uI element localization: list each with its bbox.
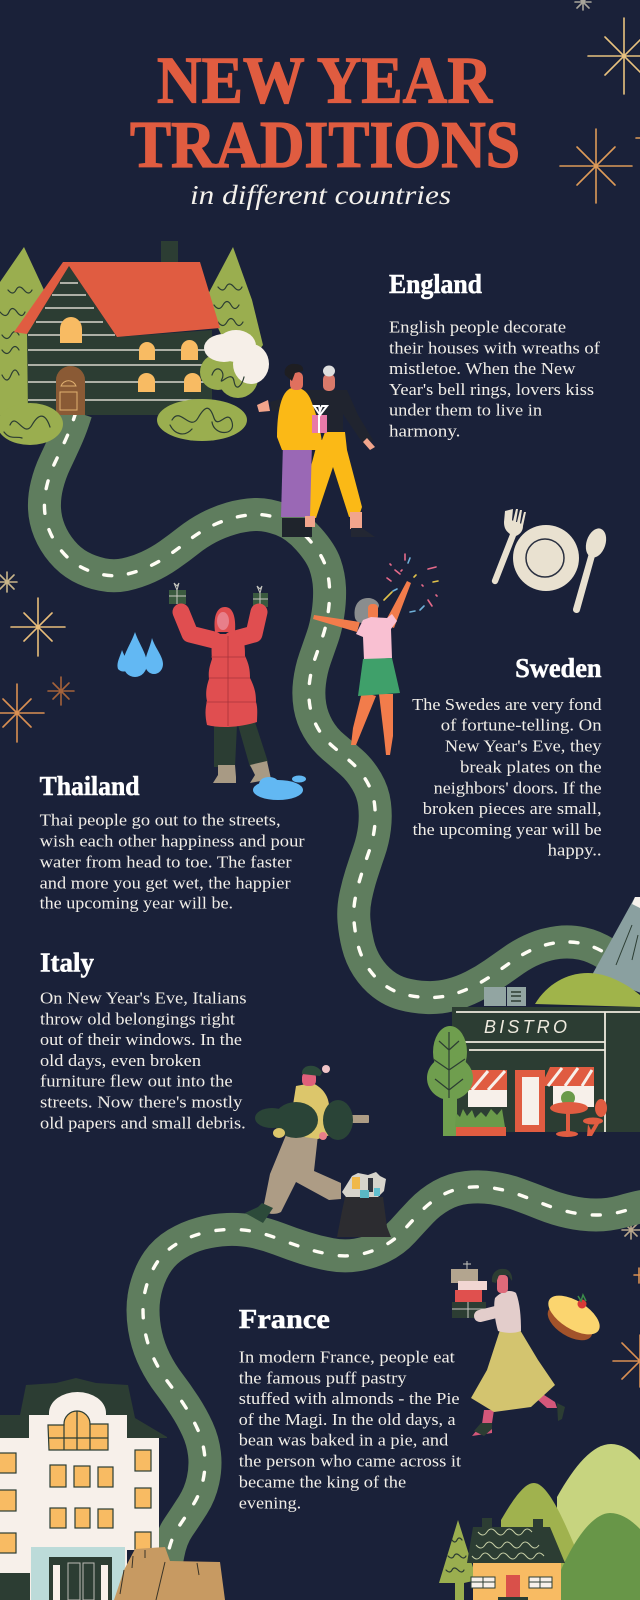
icon: arched window bbox=[48, 1411, 108, 1450]
subtitle: in different countries bbox=[190, 180, 451, 210]
heading: France: France bbox=[239, 1304, 330, 1334]
road: lower bbox=[143, 1187, 640, 1570]
text: Sweden: of fortune-telling. On bbox=[441, 716, 602, 735]
text: Italy: old papers and small debris. bbox=[40, 1113, 246, 1132]
text: Thailand: water from head to toe. The faster bbox=[40, 852, 292, 871]
text: England: harmony. bbox=[389, 422, 460, 441]
stars: left side bbox=[0, 572, 74, 742]
title bbox=[130, 44, 520, 182]
text: Sweden: neighbors' doors. If the bbox=[434, 778, 602, 797]
text: Thailand: Thai people go out to the streets, bbox=[40, 811, 281, 830]
panel: England bbox=[389, 269, 600, 441]
heading: Sweden: Sweden bbox=[515, 653, 602, 683]
text: Sweden: break plates on the bbox=[460, 757, 602, 776]
text: Thailand: and more you get wet, the happier bbox=[40, 873, 291, 892]
icon: trash bag bbox=[337, 1172, 391, 1237]
text: Thailand: wish each other happiness and pour bbox=[40, 832, 305, 851]
text: France: the person who came across it bbox=[239, 1452, 461, 1471]
text: Thailand bbox=[40, 811, 305, 912]
icon: cafe table and chair bbox=[550, 1091, 607, 1137]
icon: menu board bbox=[484, 987, 526, 1006]
icon: small pine tree bbox=[439, 1520, 477, 1600]
text: England: mistletoe. When the New bbox=[389, 359, 576, 378]
text: Italy: On New Year's Eve, Italians bbox=[40, 988, 246, 1007]
panel: France bbox=[239, 1304, 461, 1512]
panel: Thailand bbox=[40, 771, 305, 912]
text: Italy bbox=[40, 988, 246, 1132]
text: Italy: furniture flew out into the bbox=[40, 1072, 233, 1091]
illustration: hotel building bbox=[0, 1378, 167, 1600]
text: France: bean was baked in a pie, and bbox=[239, 1431, 449, 1450]
illustration: bistro building bbox=[427, 987, 640, 1137]
illustration: mountain and hill bbox=[535, 897, 640, 1007]
text: Italy: old days, even broken bbox=[40, 1051, 202, 1070]
text: Sweden: New Year's Eve, they bbox=[445, 737, 602, 756]
text: Sweden: happy.. bbox=[548, 841, 602, 860]
heading: Italy: Italy bbox=[40, 948, 94, 978]
text: France: became the king of the bbox=[239, 1472, 406, 1491]
text: England: their houses with wreaths of bbox=[389, 338, 600, 357]
illustration: woman in red puffer coat bbox=[169, 583, 271, 783]
text: France: In modern France, people eat bbox=[239, 1347, 455, 1366]
illustration: man carrying tree bbox=[245, 1065, 369, 1223]
text: England: English people decorate bbox=[389, 317, 566, 336]
text: Italy: throw old belongings right bbox=[40, 1009, 235, 1028]
text: Italy: out of their windows. In the bbox=[40, 1030, 242, 1049]
stars: top right bbox=[560, 0, 640, 203]
icon: gift left bbox=[169, 583, 186, 604]
illustration: cabin with trees and bushes bbox=[0, 241, 269, 445]
illustration: woman with gift stack bbox=[451, 1261, 565, 1436]
icon: pie bbox=[542, 1288, 606, 1347]
heading: Thailand: Thailand bbox=[40, 771, 140, 801]
text: France bbox=[239, 1347, 461, 1512]
illustration: couple with gift bbox=[257, 364, 375, 537]
text: Italy: streets. Now there's mostly bbox=[40, 1093, 243, 1112]
panel: Italy bbox=[40, 948, 246, 1132]
text: Thailand: the upcoming year will be. bbox=[40, 893, 233, 912]
text: Sweden bbox=[412, 695, 602, 860]
title: TRADITIONS bbox=[130, 108, 520, 182]
text: Sweden: the upcoming year will be bbox=[413, 820, 602, 839]
illustration: hills with cottage bbox=[439, 1444, 640, 1600]
icon: water drops bbox=[117, 632, 163, 677]
text: England: Year's bell rings, lovers kiss bbox=[389, 380, 594, 399]
text: France: of the Magi. In the old days, a bbox=[239, 1410, 456, 1429]
text: France: evening. bbox=[239, 1493, 301, 1512]
illustration: woman with confetti bbox=[313, 554, 438, 755]
text: France: the famous puff pastry bbox=[239, 1368, 407, 1387]
title: NEW YEAR bbox=[157, 44, 493, 118]
illustration: rocks bbox=[114, 1547, 225, 1600]
road: upper bbox=[44, 412, 620, 998]
icon: gift right bbox=[253, 586, 268, 607]
text: England bbox=[389, 317, 600, 441]
icon: plate with fork and spoon bbox=[492, 509, 610, 613]
text: Sweden: The Swedes are very fond bbox=[412, 695, 602, 714]
icon: puddle bbox=[253, 776, 306, 800]
heading: England: England bbox=[389, 269, 482, 299]
text: Sweden: broken pieces are small, bbox=[423, 799, 602, 818]
text: France: stuffed with almonds - the Pie bbox=[239, 1389, 460, 1408]
text: bistro sign: BISTRO bbox=[484, 1017, 567, 1037]
icon: tree bbox=[427, 1026, 473, 1136]
icon: stacked gifts bbox=[451, 1261, 487, 1318]
text: England: under them to live in bbox=[389, 401, 543, 420]
stars: lower right bbox=[613, 1221, 640, 1387]
panel: Sweden bbox=[412, 653, 602, 860]
